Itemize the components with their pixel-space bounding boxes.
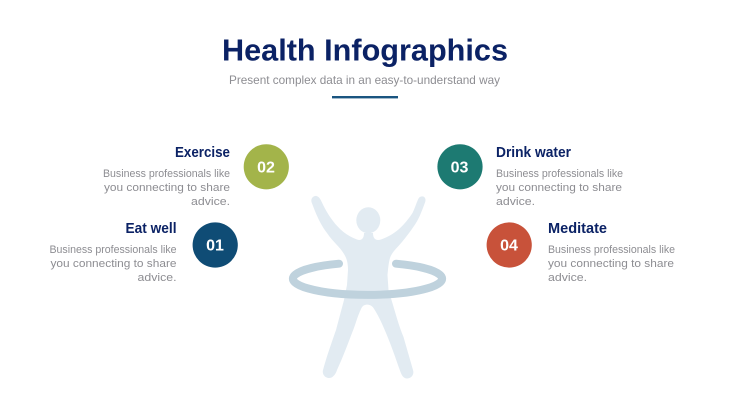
title underline: [332, 96, 398, 98]
body text: advice.: [496, 196, 535, 208]
body text: Business professionals like: [103, 168, 230, 180]
title: Health Infographics: [222, 32, 508, 68]
number badge: 03: [451, 160, 468, 176]
hula hoop: [293, 264, 442, 295]
item 02: Exercise: [103, 144, 289, 208]
heading: Drink water: [496, 144, 571, 161]
item 04: Meditate: [487, 220, 675, 284]
body text: advice.: [138, 272, 176, 284]
number badge: [244, 144, 289, 189]
number badge: 01: [206, 238, 224, 255]
body text: Business professionals like: [496, 168, 623, 180]
item 03: Drink water: [437, 144, 623, 208]
body text: advice.: [548, 272, 587, 284]
number badge: [487, 222, 532, 268]
body text: Business professionals like: [548, 244, 675, 256]
body text: you connecting to share: [496, 182, 622, 194]
figure head: [356, 207, 380, 233]
body text: you connecting to share: [548, 258, 674, 270]
number badge: 04: [500, 238, 518, 255]
subtitle: Present complex data in an easy-to-understand way: [229, 73, 500, 87]
body text: you connecting to share: [50, 258, 176, 270]
body text: you connecting to share: [104, 182, 230, 194]
number badge: 02: [257, 160, 275, 176]
heading: Exercise: [175, 144, 230, 161]
item 01: Eat well: [50, 220, 238, 284]
body text: advice.: [191, 196, 230, 208]
number badge: [193, 222, 238, 268]
figure body: [311, 196, 425, 378]
heading: Meditate: [548, 220, 607, 237]
illustration: person with hula hoop: [293, 196, 442, 378]
number badge: [437, 144, 483, 189]
body text: Business professionals like: [50, 244, 176, 256]
heading: Eat well: [126, 220, 176, 237]
